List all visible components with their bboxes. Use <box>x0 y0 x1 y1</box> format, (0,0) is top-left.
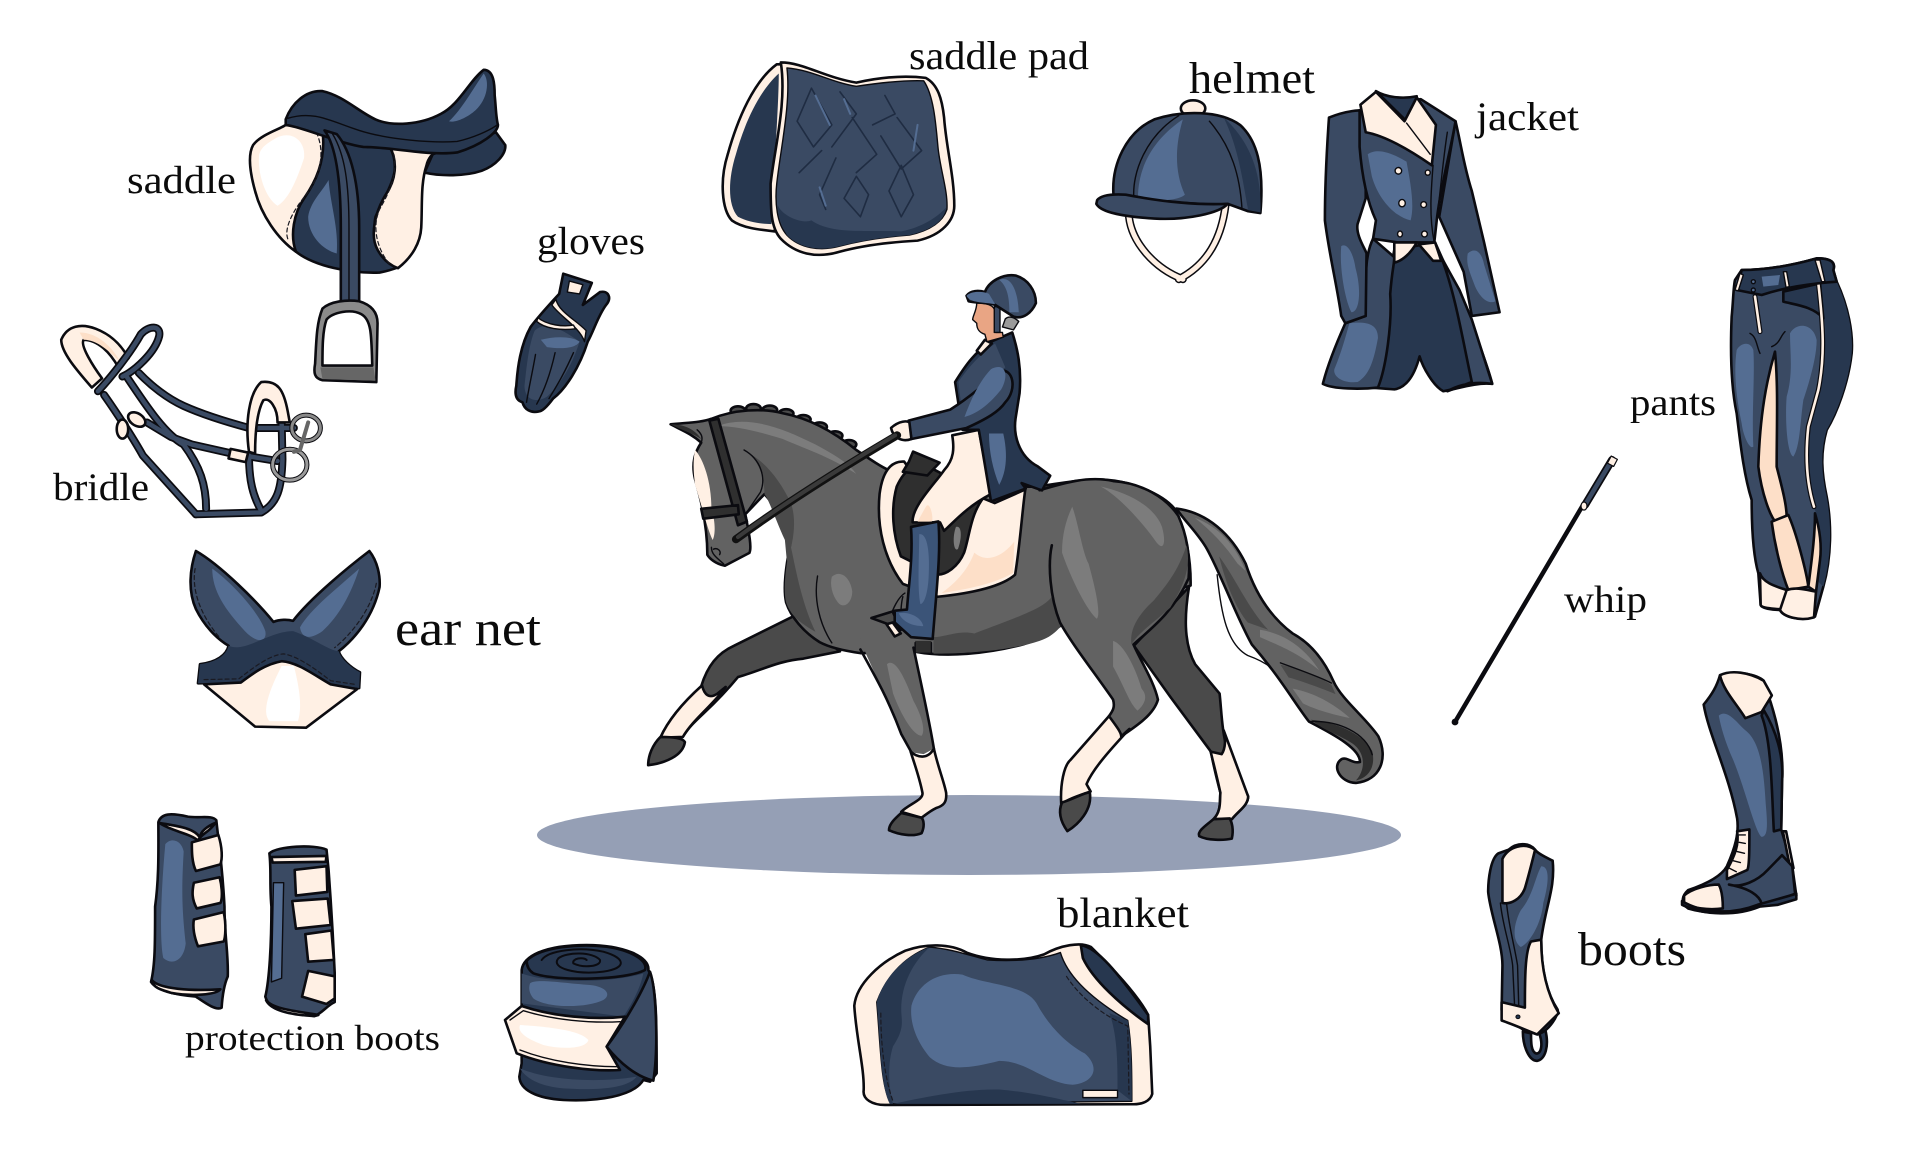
first protection boot <box>151 814 228 1008</box>
horse barrel and rump detail <box>915 597 1062 654</box>
saddle pad quilted panel <box>776 68 947 249</box>
helmet brim <box>1096 194 1228 219</box>
helmet strap <box>994 307 1000 332</box>
boot toe cap <box>1684 885 1723 909</box>
jacket left sleeve <box>1325 110 1367 323</box>
label: gloves: gloves <box>537 220 645 263</box>
horse tail <box>1176 509 1383 783</box>
label: bridle: bridle <box>53 466 149 509</box>
saddle pad diamond stitching <box>797 88 922 217</box>
mane braids <box>731 404 856 449</box>
rider coat tail <box>955 332 1050 501</box>
pants pocket <box>1783 283 1823 318</box>
item: tall boot <box>1682 672 1796 913</box>
label: saddle: saddle <box>127 159 236 202</box>
item: whip <box>1452 456 1617 725</box>
boot top cream <box>1720 672 1772 718</box>
blanket neck flap <box>1081 945 1148 1024</box>
item: helmet <box>1096 100 1261 279</box>
far hind leg <box>1134 587 1248 840</box>
pants highlights <box>1735 344 1754 447</box>
jacket right sleeve <box>1439 121 1500 316</box>
pants cuffs <box>1760 573 1787 609</box>
jacket lapel <box>1360 92 1436 165</box>
label: protection boots: protection boots <box>185 1018 440 1058</box>
chap calf cream <box>1502 846 1535 903</box>
rider collar <box>977 340 992 354</box>
item: leg bandage roll <box>505 945 657 1100</box>
label: helmet: helmet <box>1189 54 1315 103</box>
saddle seat <box>286 70 498 153</box>
bridle headpiece <box>61 326 129 388</box>
jacket waist inserts <box>1394 242 1417 263</box>
rider hand <box>891 421 911 440</box>
item: pants <box>1731 258 1852 619</box>
rider helmet <box>967 275 1036 317</box>
label: saddle pad: saddle pad <box>909 33 1089 78</box>
near hind leg <box>1040 479 1189 831</box>
reins <box>736 435 897 539</box>
bridle buckles <box>117 420 128 439</box>
blaze on horse face <box>694 450 715 540</box>
jacket neck <box>1376 91 1417 121</box>
bandage band highlight <box>529 981 607 1006</box>
boot sole <box>1682 894 1796 913</box>
rider boot and stirrup <box>871 521 939 639</box>
item: half chaps <box>1488 844 1559 1061</box>
ground shadow ellipse <box>537 795 1401 875</box>
noseband on horse <box>701 505 739 519</box>
item: blanket <box>854 944 1152 1105</box>
saddle right flap <box>374 147 439 268</box>
helmet dome <box>1113 113 1261 213</box>
chap stirrup loop <box>1523 1030 1547 1061</box>
jacket back lining <box>1370 242 1492 391</box>
item: saddle <box>250 70 505 382</box>
pants side seam <box>1807 283 1823 507</box>
saddle left flap <box>250 125 327 252</box>
rider face <box>973 303 1003 342</box>
item: bridle <box>61 326 320 514</box>
bridle on head <box>709 419 747 525</box>
stirrup iron <box>314 301 378 382</box>
rider legs breeches <box>913 430 991 531</box>
saddle on horse <box>893 465 987 575</box>
item: saddle pad <box>723 62 954 255</box>
far foreleg raised <box>648 616 840 765</box>
second protection boot <box>265 846 335 1016</box>
illustration: horse with rider <box>648 275 1383 840</box>
bandage velcro tab <box>505 1006 625 1070</box>
ear net nose <box>204 661 357 728</box>
blanket label tag <box>1083 1090 1118 1098</box>
label: blanket: blanket <box>1057 891 1189 937</box>
rider <box>701 275 1050 539</box>
saddle central panel <box>293 130 398 273</box>
horse neck and body <box>671 404 1191 655</box>
ear net highlights <box>212 569 266 640</box>
label: whip: whip <box>1564 579 1647 621</box>
rider hair <box>1002 317 1019 330</box>
bridle straps <box>98 328 294 514</box>
label: jacket: jacket <box>1474 94 1579 139</box>
pants dark side <box>1807 282 1852 587</box>
bridle bit rings <box>292 415 320 441</box>
blanket main panel <box>877 947 1132 1104</box>
bridle noseband <box>247 382 290 454</box>
boot laces <box>1727 829 1749 879</box>
label: pants: pants <box>1630 382 1716 424</box>
label: boots: boots <box>1578 923 1686 976</box>
jacket buttons <box>1395 168 1430 237</box>
blanket highlight <box>911 974 1094 1085</box>
helmet button <box>1181 100 1205 116</box>
stirrup leather <box>324 130 359 303</box>
jacket right tail <box>1441 257 1492 391</box>
helmet straps <box>1129 204 1226 279</box>
rider sleeve <box>909 371 1013 439</box>
item: gloves <box>516 274 609 412</box>
saddle pad on horse <box>879 452 1025 597</box>
jacket torso <box>1360 99 1456 242</box>
jacket left tail <box>1323 239 1394 389</box>
bandage end flap <box>607 972 656 1081</box>
bandage spiral top <box>527 945 645 979</box>
near foreleg <box>860 635 946 835</box>
pants knee patch <box>1758 352 1787 523</box>
item: protection boots <box>151 814 335 1016</box>
pants waistband <box>1737 258 1837 295</box>
boot heel panel <box>1729 855 1795 904</box>
item: jacket <box>1323 91 1500 391</box>
label: ear net: ear net <box>395 600 541 656</box>
chest and shoulder shading <box>785 544 816 632</box>
item: ear net <box>191 551 380 728</box>
